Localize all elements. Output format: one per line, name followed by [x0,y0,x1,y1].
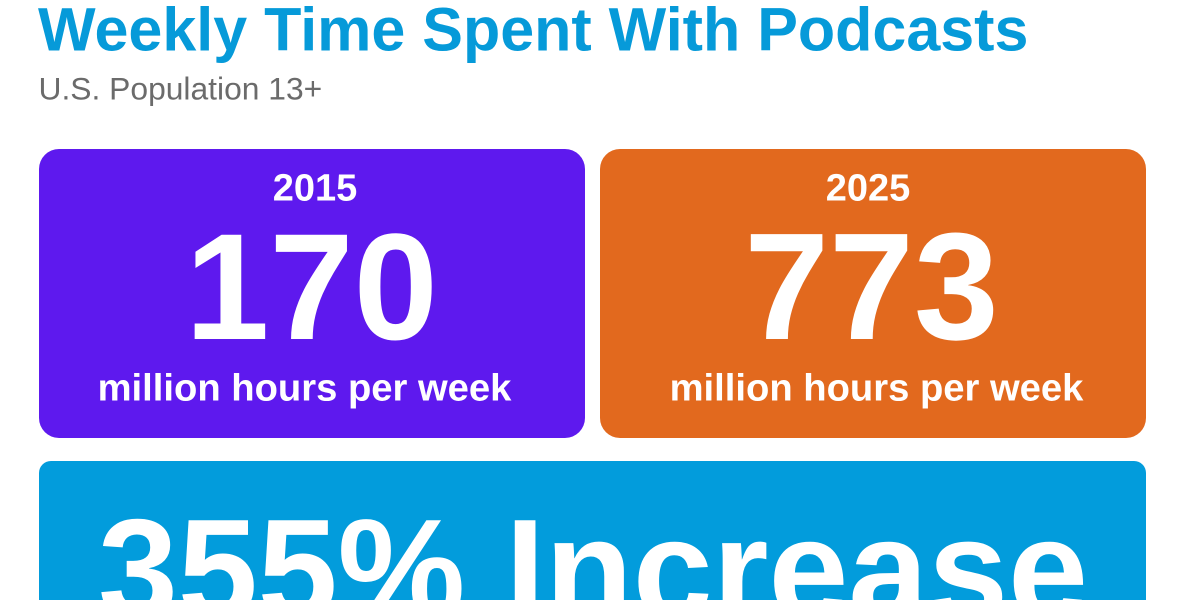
panel: 2025 [600,149,1146,438]
panel: increase [39,461,1146,600]
unit 2015: million hours per week [98,366,512,410]
value 170: 170 [185,203,438,372]
value 773: 773 [744,202,999,372]
year 2015: 2015 [273,168,357,210]
subtitle: U.S. Population 13+ [38,70,322,106]
unit 2025: million hours per week [670,366,1084,410]
year 2025: 2025 [826,168,910,210]
panel: 2015 [39,149,585,438]
